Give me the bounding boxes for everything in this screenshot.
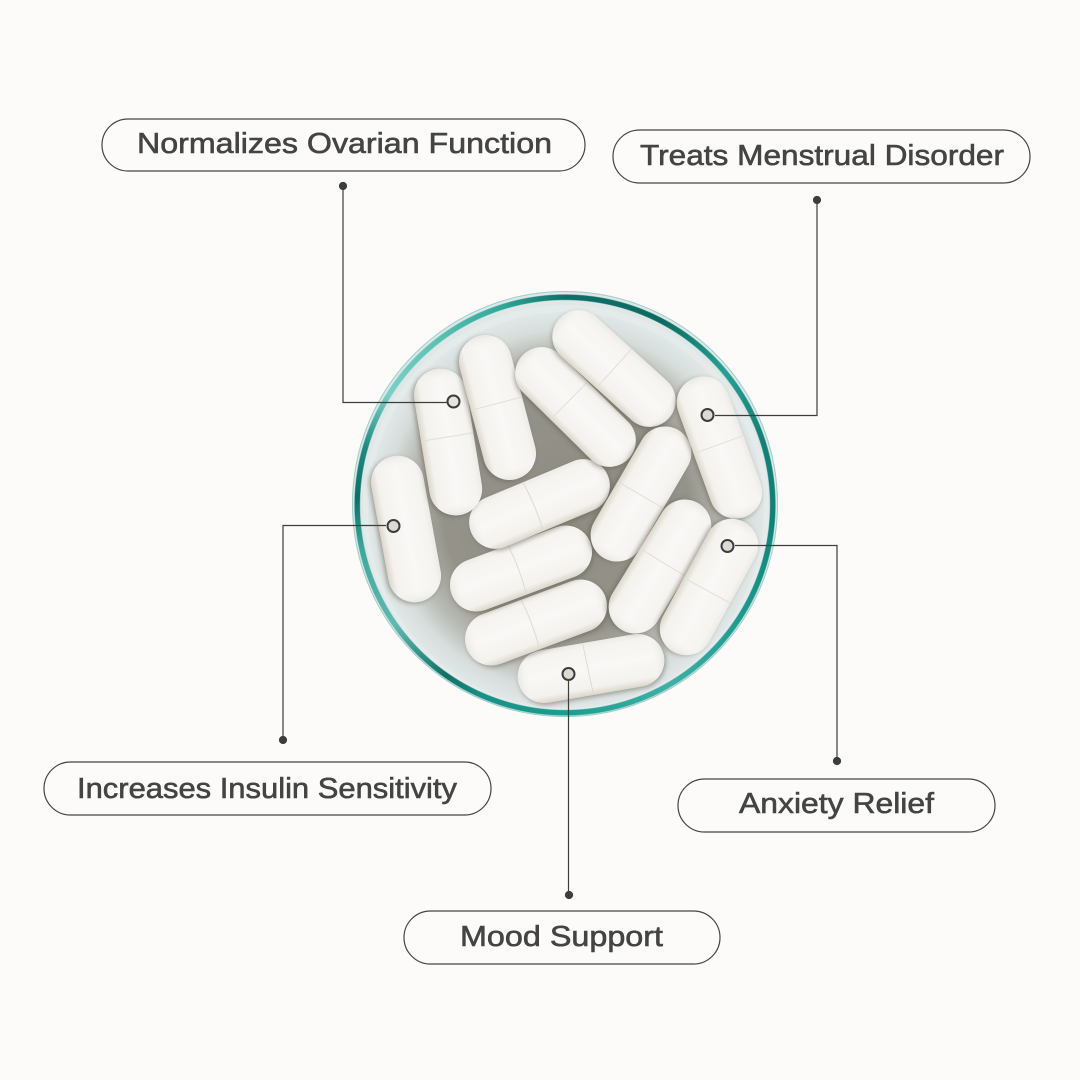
label: increases insulin sensitivity: Increases Insulin Sensitivity bbox=[77, 773, 458, 805]
connector: mood support bbox=[562, 668, 574, 898]
capsule bbox=[408, 365, 486, 521]
capsule bbox=[604, 498, 712, 636]
label: mood support bbox=[404, 911, 720, 964]
capsule bbox=[586, 424, 692, 562]
connector: treats menstrual disorder bbox=[702, 196, 820, 421]
capsule bbox=[469, 459, 612, 553]
capsule bbox=[454, 334, 536, 482]
label: mood support: Mood Support bbox=[460, 921, 663, 953]
capsule bbox=[512, 346, 636, 472]
label: anxiety relief: Anxiety Relief bbox=[739, 788, 935, 820]
dish glass ring bbox=[352, 292, 778, 718]
capsule bbox=[366, 454, 442, 606]
connector: normalizes ovarian function bbox=[340, 182, 460, 408]
label: normalizes ovarian function bbox=[102, 119, 585, 171]
capsule bbox=[549, 310, 676, 430]
label: normalizes ovarian function: Normalizes Ovarian Function bbox=[137, 128, 552, 160]
label: anxiety relief bbox=[678, 779, 995, 832]
capsules in dish bbox=[365, 299, 770, 709]
capsule bbox=[450, 526, 594, 616]
capsule bbox=[655, 516, 758, 658]
label: treats menstrual disorder bbox=[613, 130, 1030, 183]
connector: anxiety relief bbox=[722, 540, 840, 764]
capsule bbox=[464, 580, 608, 670]
connector: increases insulin sensitivity bbox=[280, 520, 400, 744]
capsule bbox=[514, 630, 670, 709]
label: increases insulin sensitivity bbox=[44, 762, 491, 815]
label: treats menstrual disorder: Treats Menstrual Disorder bbox=[640, 140, 1004, 172]
capsule bbox=[672, 375, 764, 521]
